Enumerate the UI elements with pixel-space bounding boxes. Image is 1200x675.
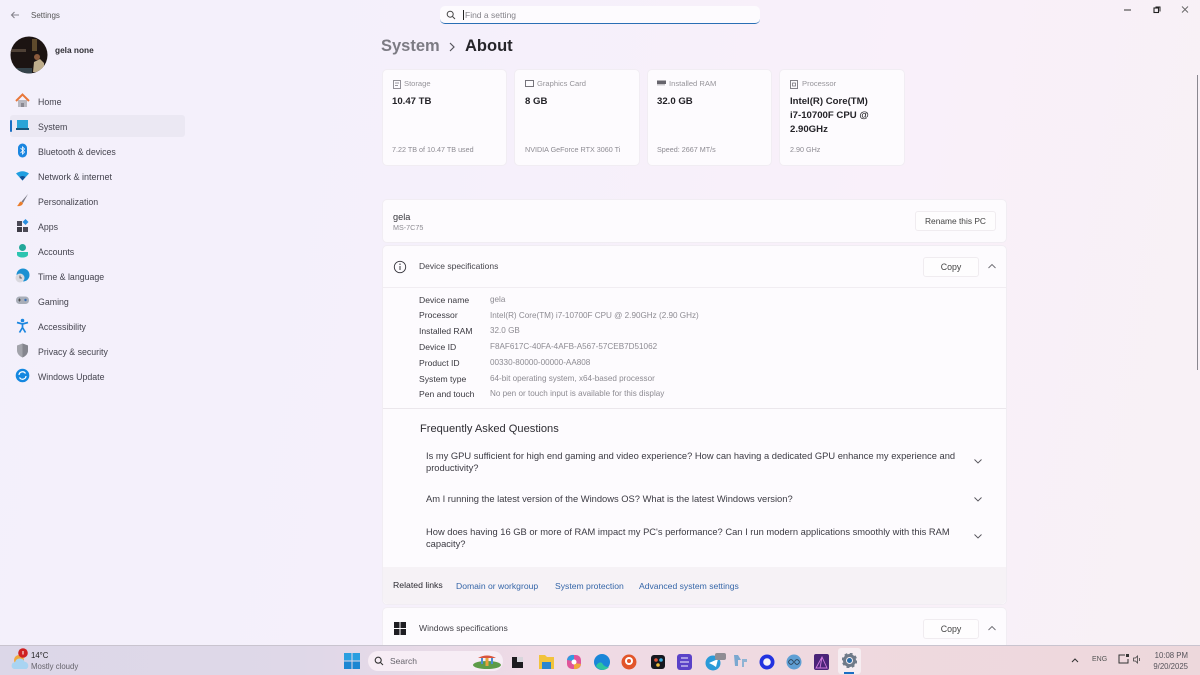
- nav: system selected: [10, 115, 185, 137]
- taskbar: [0, 645, 1200, 675]
- card: processor: 2.90GHz: [790, 124, 828, 134]
- icon: storage: [393, 80, 401, 89]
- clock: 9/20/2025: [1153, 662, 1188, 671]
- nav: privacy and security: [17, 344, 108, 358]
- nav: bluetooth: Bluetooth & devices: [38, 146, 116, 156]
- nav: gaming: [16, 296, 69, 307]
- FAQ item 3: How does having 16 GB or more of RAM impact my PC's performance? Can I run modern applications smoothly with this RAM capacity?: [426, 526, 950, 549]
- icon: processor: [790, 80, 798, 89]
- card: processor: i7-10700F CPU @: [790, 110, 869, 120]
- icon: RAM: [657, 80, 666, 86]
- clock: [1153, 651, 1188, 671]
- spec list: Device name: [419, 295, 469, 305]
- panel: windows specifications: [382, 607, 1007, 645]
- nav: windows update: [16, 368, 104, 382]
- icon: graphics card: [525, 80, 534, 87]
- nav: home: Home: [38, 96, 61, 106]
- spec list: 32.0 GB: [490, 326, 520, 335]
- nav: accounts: [17, 244, 74, 258]
- weather widget: Mostly cloudy: [31, 662, 78, 671]
- spec list: Product ID: [419, 358, 460, 368]
- active settings app: [838, 648, 861, 674]
- breadcrumb heading: System: [381, 37, 440, 55]
- FAQ chevron 3: [974, 534, 982, 538]
- spec list: Installed RAM: [419, 326, 472, 336]
- spec list: gela: [490, 295, 505, 304]
- nav: accessibility: [16, 318, 86, 333]
- card: installed RAM: Installed RAM: [669, 79, 716, 88]
- FAQ chevron 2: [974, 497, 982, 502]
- FAQ item 1: Is my GPU sufficient for high end gaming and video experience? How can having a dedicated GPU enhance my experience and productivity?: [426, 450, 955, 473]
- card: installed RAM: Speed: 2667 MT/s: [657, 145, 716, 154]
- panel: windows specifications: Windows specifications: [419, 623, 508, 633]
- spec list: Processor: [419, 310, 458, 320]
- nav: time and language: [16, 268, 104, 282]
- card: processor: 2.90 GHz: [790, 145, 820, 154]
- scrollbar: [1197, 75, 1198, 370]
- panel: device specifications: [382, 245, 1007, 605]
- icon: collapse chevron: [988, 626, 996, 630]
- spec list: [419, 295, 699, 398]
- nav: gaming: Gaming: [38, 296, 69, 306]
- card: installed RAM: 32.0 GB: [657, 96, 693, 106]
- nav: time and language: Time & language: [38, 272, 104, 282]
- nav: windows update: Windows Update: [38, 372, 104, 382]
- spec list: 64-bit operating system, x64-based processor: [490, 374, 655, 382]
- related links bar: [383, 567, 1006, 604]
- card: installed RAM: [647, 69, 772, 166]
- nav: privacy and security: Privacy & security: [38, 346, 108, 356]
- weather widget: [12, 648, 78, 671]
- taskbar search: Search: [390, 656, 417, 666]
- button: rename: [915, 211, 996, 231]
- card: storage: 7.22 TB of 10.47 TB used: [392, 145, 474, 154]
- nav: apps: Apps: [38, 222, 58, 232]
- panel: device name: MS-7C75: [393, 222, 423, 232]
- card: storage: 10.47 TB: [392, 96, 431, 106]
- card: graphics card: 8 GB: [525, 96, 547, 106]
- button: copy: [923, 257, 979, 277]
- button: copy: Copy: [941, 624, 961, 634]
- user avatar: [10, 36, 48, 74]
- spec list: No pen or touch input is available for this display: [490, 388, 664, 398]
- system tray: ENG: [1092, 656, 1107, 663]
- spec list: Pen and touch: [419, 388, 474, 398]
- nav: accessibility: Accessibility: [38, 322, 86, 332]
- FAQ item 2: Am I running the latest version of the Windows OS? What is the latest Windows version?: [426, 494, 793, 504]
- card: storage: [382, 69, 507, 166]
- nav: accounts: Accounts: [38, 246, 74, 256]
- icon: collapse chevron: [988, 264, 996, 268]
- back arrow: [10, 12, 19, 18]
- related links bar: System protection: [555, 580, 624, 590]
- nav: system selected: System: [38, 122, 67, 132]
- user name: gela none: [55, 45, 94, 55]
- spec list: F8AF617C-40FA-4AFB-A567-57CEB7D51062: [490, 342, 657, 350]
- card: processor: Processor: [802, 79, 836, 88]
- search box: Find a setting: [465, 10, 516, 20]
- card: graphics card: NVIDIA GeForce RTX 3060 Ti: [525, 145, 620, 154]
- button: copy: [923, 619, 979, 639]
- panel: device name: gela: [393, 212, 410, 222]
- FAQ chevron 1: [974, 459, 982, 464]
- nav: bluetooth: [18, 144, 116, 158]
- system tray: [1072, 654, 1140, 664]
- taskbar search: [368, 651, 503, 671]
- related links bar: Related links: [393, 580, 443, 590]
- card: storage: Storage: [404, 79, 431, 88]
- spec list: Intel(R) Core(TM) i7-10700F CPU @ 2.90GHz (2.90 GHz): [490, 310, 699, 320]
- related links bar: Domain or workgroup: [456, 580, 538, 590]
- section heading: Device specifications: [419, 261, 498, 271]
- panel: device name: [382, 199, 1007, 243]
- nav: personalization: [17, 194, 98, 206]
- card: graphics card: Graphics Card: [537, 79, 586, 88]
- sidebar navigation: [10, 93, 185, 382]
- icon: windows logo: [394, 622, 406, 635]
- taskbar app icons: [512, 653, 829, 670]
- FAQ heading: Frequently Asked Questions: [420, 422, 559, 434]
- card: processor: Intel(R) Core(TM): [790, 96, 868, 106]
- spec list: System type: [419, 374, 466, 384]
- button: rename: Rename this PC: [925, 216, 986, 226]
- card: processor: [779, 69, 905, 166]
- nav: home: [15, 93, 62, 107]
- breadcrumb heading: [381, 37, 513, 55]
- clock: 10:08 PM: [1155, 651, 1188, 660]
- nav: personalization: Personalization: [38, 196, 98, 206]
- nav: apps: [17, 219, 58, 232]
- spec list: 00330-80000-00000-AA808: [490, 358, 590, 366]
- icon: info: [394, 260, 406, 274]
- weather widget: 14°C: [31, 651, 48, 660]
- search box: [440, 6, 760, 24]
- nav: network: Network & internet: [38, 172, 112, 182]
- breadcrumb heading: About: [465, 37, 513, 55]
- start button: [344, 653, 360, 669]
- card: graphics card: [514, 69, 640, 166]
- app title: Settings: [31, 11, 60, 20]
- window controls: [1124, 6, 1188, 14]
- spec list: Device ID: [419, 342, 456, 352]
- button: copy: Copy: [941, 262, 961, 272]
- related links bar: Advanced system settings: [639, 580, 739, 590]
